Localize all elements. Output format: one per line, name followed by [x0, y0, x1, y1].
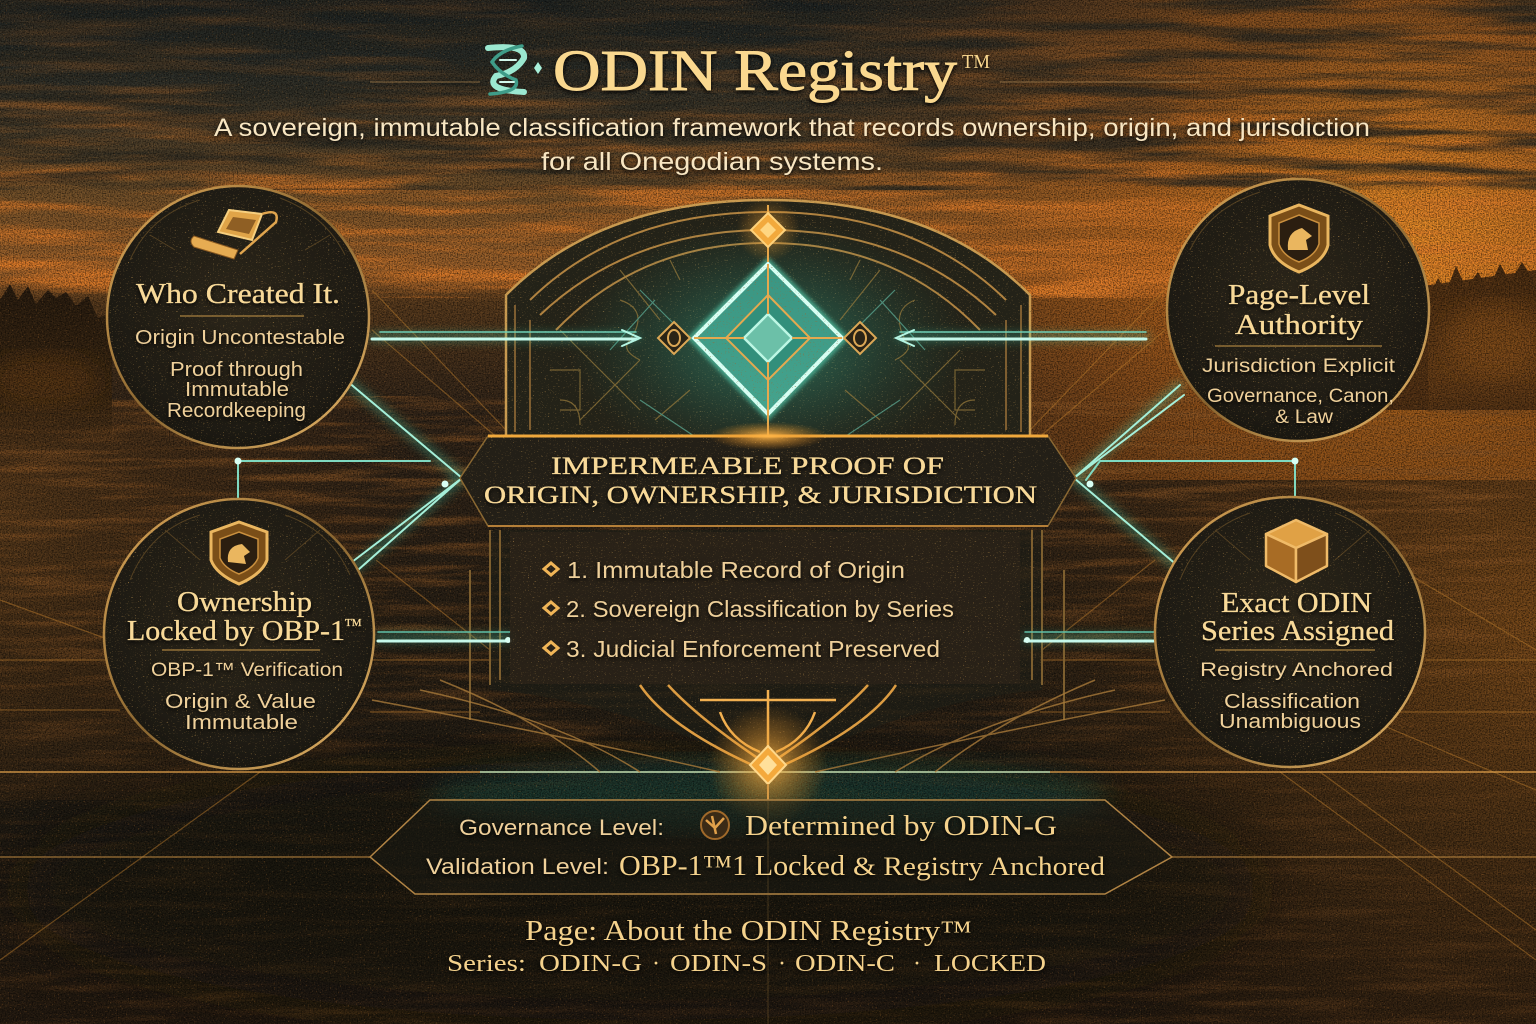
- shield circuit etchings: [550, 260, 985, 440]
- circle: page-level authority: [1167, 179, 1429, 441]
- connector nodes: [234, 458, 1298, 643]
- icon bullets: [544, 563, 558, 654]
- banner: impermeable proof: ORIGIN, OWNERSHIP, & JURISDICTION: [484, 482, 1037, 509]
- circle: page-level authority: & Law: [1275, 407, 1333, 428]
- circle: exact odin series: Exact ODIN: [1221, 588, 1372, 619]
- panel: governance and validation: Determined by ODIN-G: [745, 811, 1057, 842]
- subtitle: [214, 114, 1370, 176]
- footer text: ODIN-C: [795, 951, 895, 977]
- footer text: LOCKED: [934, 951, 1046, 977]
- circle: exact odin series: [1155, 497, 1425, 767]
- circle: ownership locked: Ownership: [177, 587, 312, 618]
- subtitle: for all Onegodian systems.: [541, 148, 883, 176]
- icon: scroll: [191, 210, 277, 259]
- circle: exact odin series: Registry Anchored: [1200, 660, 1393, 681]
- circle: page-level authority: Governance, Canon,: [1207, 386, 1394, 407]
- banner: impermeable proof: [460, 422, 1076, 526]
- subtitle: A sovereign, immutable classification framework that records ownership, origin, and jurisdiction: [214, 114, 1370, 142]
- circle: who created it: Recordkeeping: [167, 400, 306, 422]
- emblem: teal diamond: [658, 205, 876, 436]
- footer text: Series:: [447, 951, 526, 977]
- list items: 3. Judicial Enforcement Preserved: [566, 636, 940, 662]
- footer text: ODIN-G: [539, 951, 642, 977]
- footer text: ·: [778, 951, 786, 977]
- panel: governance and validation: & Registry Anchored: [853, 852, 1105, 881]
- central shield: [372, 200, 1165, 772]
- circle: page-level authority: Jurisdiction Explicit: [1202, 356, 1396, 377]
- banner: impermeable proof: IMPERMEABLE PROOF OF: [551, 453, 944, 480]
- circle: ownership locked: Immutable: [185, 712, 298, 734]
- circle: exact odin series: Classification: [1224, 691, 1360, 713]
- bottom gold diamond: [708, 705, 828, 825]
- circle: ownership locked: OBP-1™ Verification: [151, 660, 343, 681]
- footer text: [447, 916, 1046, 977]
- footer text: ·: [913, 951, 921, 977]
- title: [370, 38, 1200, 103]
- icon: dna helix: [488, 46, 542, 94]
- circle: page-level authority: Page-Level: [1228, 280, 1370, 311]
- list items: [566, 557, 954, 662]
- circle: exact odin series: Series Assigned: [1201, 616, 1394, 647]
- circle: ownership locked: TM: [345, 617, 362, 629]
- list items: 1. Immutable Record of Origin: [567, 557, 905, 583]
- panel: governance and validation: [0, 784, 1536, 1024]
- icon: governance emblem: [701, 811, 729, 839]
- footer text: Page: About the ODIN Registry™: [525, 916, 972, 947]
- title: ODIN Registry: [553, 38, 957, 103]
- circle: who created it: Who Created It.: [136, 278, 340, 310]
- circle: ownership locked: Locked by OBP-1: [127, 616, 345, 647]
- panel: governance and validation: Governance Level:: [459, 815, 664, 840]
- list items: 2. Sovereign Classification by Series: [566, 596, 954, 622]
- teal connector lines: [238, 330, 1295, 641]
- panel: numbered list: [510, 532, 1020, 684]
- icon: shield: [211, 522, 267, 584]
- circle: page-level authority: Authority: [1235, 310, 1363, 341]
- circle: exact odin series: Unambiguous: [1219, 711, 1361, 733]
- circle: who created it: [107, 186, 369, 448]
- title: TM: [962, 51, 990, 73]
- footer text: ·: [652, 951, 660, 977]
- circle: who created it: Origin Uncontestable: [135, 327, 345, 349]
- circle: who created it: Immutable: [185, 379, 289, 401]
- circle: who created it: Proof through: [170, 359, 303, 381]
- top gold diamond: [736, 198, 800, 262]
- bottom horizon line: [0, 771, 1536, 773]
- footer text: ODIN-S: [670, 951, 767, 977]
- perspective ground lines: [0, 290, 1536, 960]
- panel: governance and validation: Validation Level:: [426, 854, 609, 879]
- shield lower frame: [372, 530, 1165, 772]
- circle: ownership locked: Origin & Value: [165, 691, 316, 713]
- panel: governance and validation: OBP-1™1 Locked: [619, 850, 846, 882]
- icon: cube: [1266, 520, 1327, 582]
- icon: shield: [1270, 205, 1328, 272]
- circle: ownership locked: [104, 499, 374, 769]
